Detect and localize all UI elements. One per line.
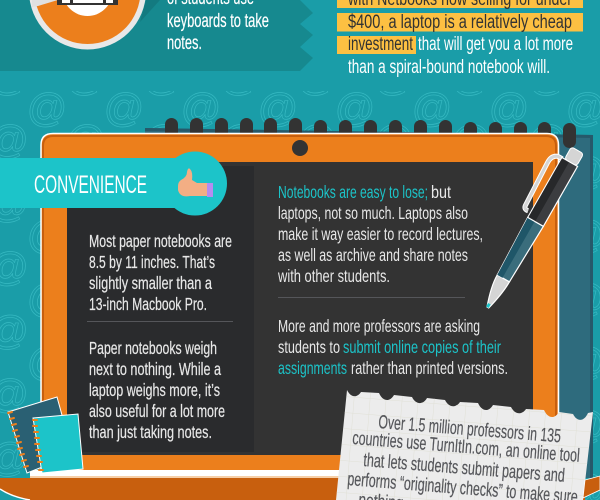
torn paper note [336, 390, 593, 500]
screen [67, 162, 533, 455]
stat text: keyboards to take [167, 11, 269, 32]
right column text: submit online copies of their [343, 337, 501, 357]
right column text: More and more professors are asking [278, 316, 480, 336]
laptop lid [41, 134, 558, 480]
right column text: students to [278, 337, 340, 357]
right column text: make it way easier to record lectures, [278, 224, 483, 244]
pen [470, 140, 584, 311]
left column text: Most paper notebooks are [89, 231, 232, 251]
spiral [8, 412, 43, 470]
pen tip [481, 275, 509, 310]
left screen panel [67, 166, 254, 452]
left column text: slightly smaller than a [89, 273, 212, 293]
laptop base [0, 478, 585, 500]
laptop [0, 134, 585, 500]
left column text: 13-inch Macbook Pro. [89, 294, 207, 314]
pen clip [522, 153, 562, 213]
teal notebook [33, 414, 83, 473]
left column text: than just taking notes. [89, 422, 212, 442]
right column text: but [431, 182, 451, 202]
convenience banner [0, 152, 227, 216]
right column text: rather than printed versions. [351, 358, 508, 378]
base corner [583, 476, 600, 498]
left column text: Paper notebooks weigh [89, 338, 217, 358]
convenience banner: CONVENIENCE [34, 171, 147, 199]
note text [347, 412, 581, 500]
right column text [277, 182, 508, 378]
camera [292, 140, 308, 156]
pen button [565, 147, 584, 166]
right column text: as well as archive and share notes [278, 245, 468, 265]
right column text: with other students. [277, 266, 390, 286]
icon: thumbs up [178, 168, 213, 197]
back notebook [145, 128, 593, 478]
pen barrel dark [528, 157, 578, 226]
notebooks illustration [8, 397, 83, 473]
top spiral ring [563, 123, 576, 148]
left column text: 8.5 by 11 inches. That’s [89, 252, 215, 272]
stat text [167, 0, 269, 54]
left column text: next to nothing. While a [89, 359, 221, 379]
left column text: laptop weighs more, it’s [89, 380, 220, 400]
right column text: laptops, not so much. Laptops also [278, 203, 468, 223]
investment callout [337, 0, 583, 78]
right column text: Notebooks are easy to lose; [278, 182, 428, 202]
stat text: notes. [167, 33, 202, 54]
left column text [87, 231, 233, 442]
spiral binding [165, 118, 551, 144]
left column text: also useful for a lot more [89, 401, 225, 421]
right column text: assignments [278, 358, 347, 378]
pie chart icon [29, 0, 160, 50]
pen barrel teal [496, 217, 543, 283]
investment callout: investment [348, 34, 414, 55]
top band [0, 0, 313, 71]
dark notebook [8, 397, 73, 473]
